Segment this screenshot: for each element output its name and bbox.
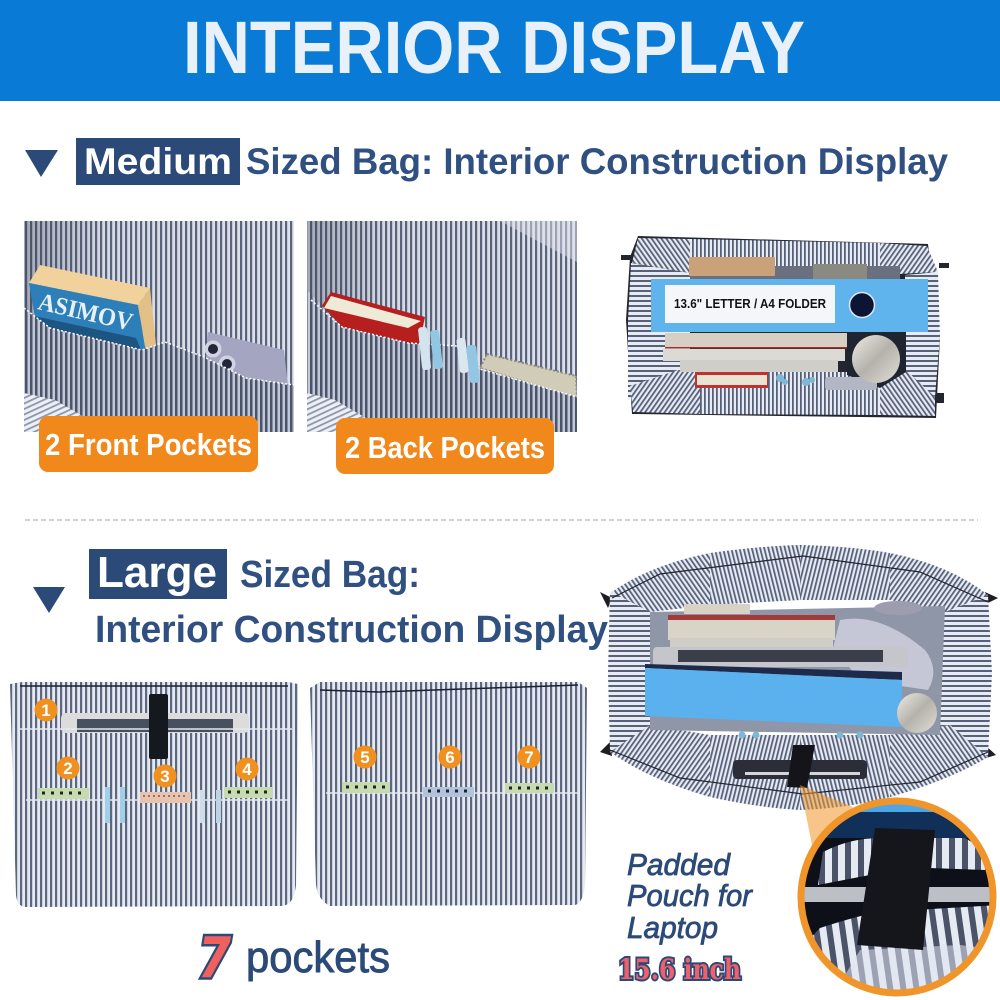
black strap [149, 694, 168, 759]
icon: back pocket pens [418, 327, 480, 383]
stack of books [663, 333, 847, 388]
badge 2: 2 [63, 759, 73, 778]
badge 7 [518, 746, 540, 768]
badge 7: 7 [524, 748, 534, 767]
badge 1 [34, 698, 58, 722]
book at back of bag [689, 257, 775, 276]
icon: large bag bottle cap [897, 693, 937, 733]
panel: large bag front pockets [10, 682, 298, 907]
header banner [0, 0, 1000, 101]
label: 2 back pockets [336, 418, 554, 474]
laptop pouch [733, 760, 867, 779]
title: INTERIOR DISPLAY [183, 6, 805, 89]
badge 6: 6 [445, 748, 455, 767]
back pocket fabric [307, 290, 577, 432]
heading: large sized bag: Sized Bag: [240, 554, 420, 596]
icon: pens in medium bag [776, 374, 815, 386]
heading: medium sized bag: Sized Bag: Interior Construction Display [246, 141, 948, 182]
text: 7 pockets: pockets [246, 933, 390, 982]
panel: large bag top view [600, 545, 998, 810]
panel: front pockets photo [24, 221, 294, 432]
heading: large sized bag: Large [97, 548, 217, 597]
badge 2 [56, 756, 80, 780]
comb: green [342, 782, 390, 793]
icon: spiral notebook [480, 354, 577, 398]
icon: large section triangle [33, 587, 65, 613]
blue folder [651, 279, 928, 332]
heading: large sized bag: Interior Construction Display [95, 609, 608, 651]
panel: medium bag top view [621, 236, 949, 418]
icon: pens [105, 787, 221, 823]
heading: medium sized bag: Medium [84, 141, 232, 182]
icon: phone in medium bag [825, 377, 877, 390]
heading: large sized bag [89, 548, 608, 651]
comb: green right [224, 787, 272, 798]
heading: medium sized bag [76, 138, 948, 185]
label: 2 front pockets: 2 Front Pockets [45, 427, 252, 462]
label: 2 front pockets [39, 416, 258, 472]
text: 7 pockets [198, 926, 390, 991]
icon: asimov book [29, 265, 156, 352]
text: padded pouch for laptop: Padded [627, 847, 732, 882]
text: 15.6 inch: 15.6 inch [618, 953, 741, 986]
text: 7 pockets: 7 [198, 926, 231, 991]
comb: pink [140, 792, 191, 803]
laptop [653, 647, 908, 667]
icon: large bag pens [738, 732, 864, 738]
text: padded pouch for laptop [627, 847, 754, 945]
comb: green left [38, 788, 89, 799]
callout: strap close-up [790, 795, 1000, 1000]
text: padded pouch for laptop: Pouch for [627, 878, 754, 913]
badge 5: 5 [360, 748, 370, 767]
label: 2 back pockets: 2 Back Pockets [345, 430, 545, 465]
text: padded pouch for laptop: Laptop [627, 910, 718, 945]
icon: grey mouse [874, 601, 922, 615]
icon: red book [321, 292, 425, 345]
icon: medium section triangle [25, 150, 58, 177]
front pocket fabric [24, 308, 294, 432]
badge 1: 1 [41, 701, 51, 720]
badge 5 [354, 746, 376, 768]
blue folder: 13.6" LETTER / A4 FOLDER [674, 296, 827, 311]
section divider [25, 519, 978, 521]
large bag blue folder [645, 668, 902, 727]
badge 4: 4 [242, 760, 252, 779]
black strap [787, 745, 815, 788]
callout: zoom wedge [800, 785, 853, 850]
large bag corner tabs [600, 592, 998, 758]
badge 3 [154, 764, 176, 788]
badge 3: 3 [160, 767, 170, 786]
badge 6 [438, 746, 462, 768]
tablet [61, 713, 249, 733]
icon: phone [204, 332, 288, 384]
notebook at back of bag [813, 264, 867, 279]
comb: blue [423, 787, 474, 797]
grey pouch [833, 619, 933, 690]
icon: bottle cap [852, 335, 900, 383]
panel: large bag back pockets [310, 682, 587, 906]
badge 4 [236, 758, 258, 780]
folder label [665, 285, 835, 323]
comb: green [505, 783, 554, 793]
panel: back pockets photo [307, 221, 577, 432]
large bag book stack [668, 604, 835, 650]
icon: asimov book: ASIMOV [36, 289, 135, 336]
